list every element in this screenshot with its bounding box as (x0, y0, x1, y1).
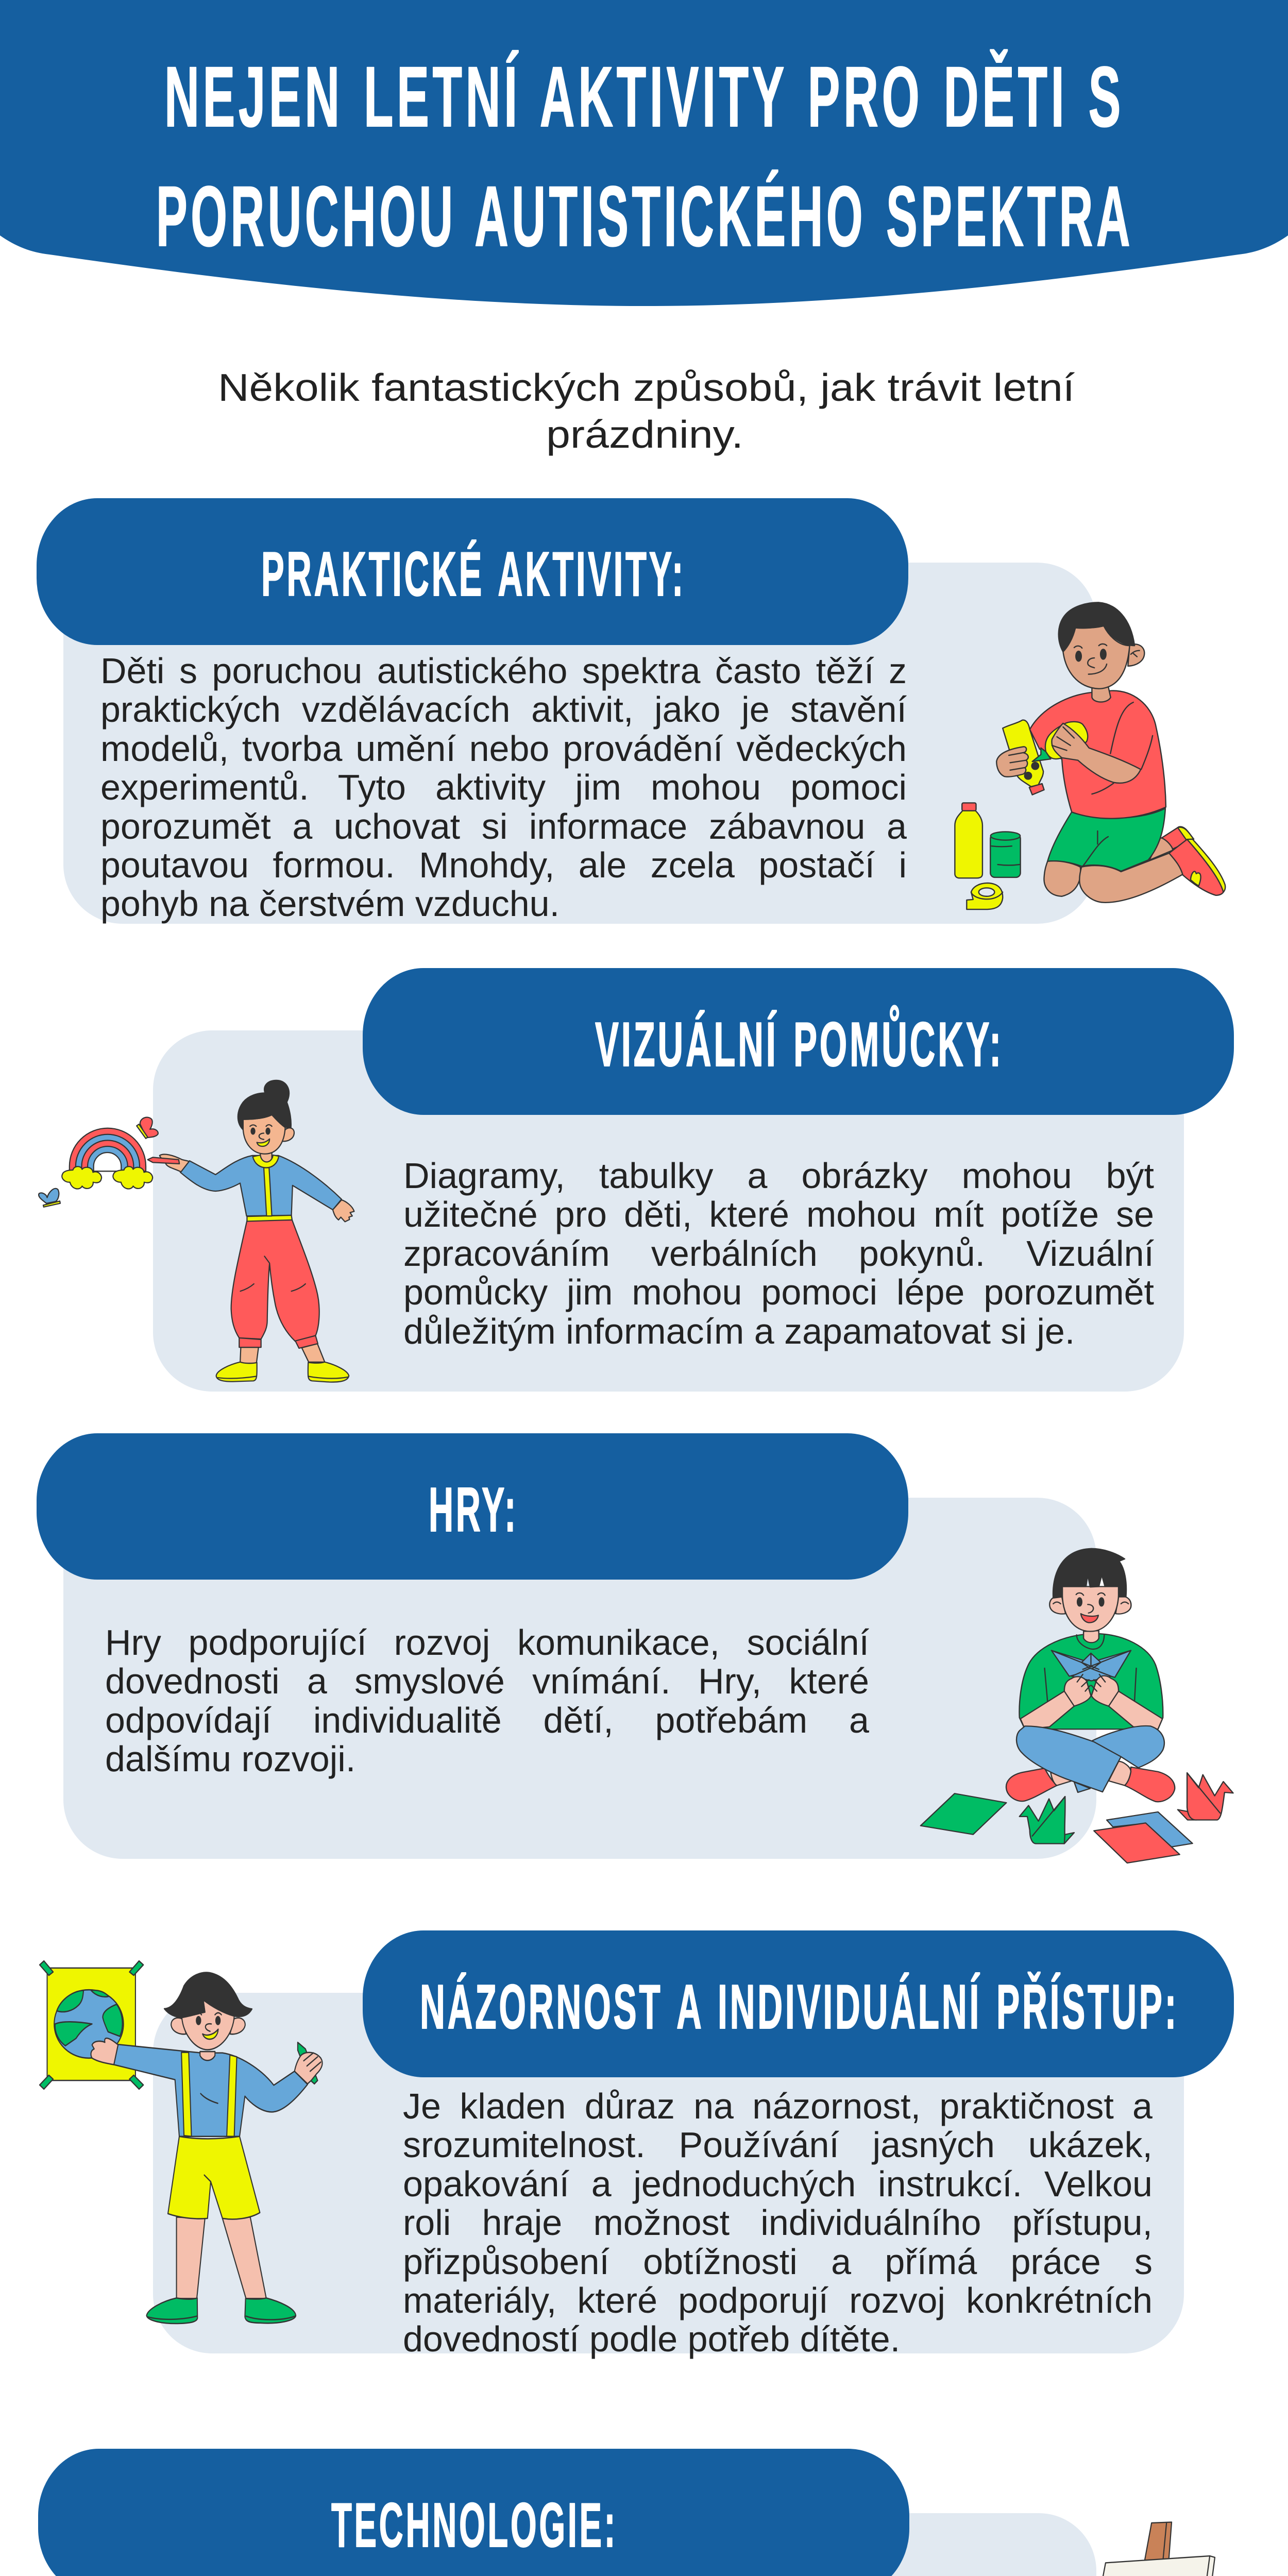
icon: green pencil (298, 2042, 317, 2084)
text: demonstration and individual approach: materiály, které podporují rozvoj konkrétních (403, 2280, 1153, 2320)
text: demonstration and individual approach: dovedností podle potřeb dítěte. (403, 2319, 900, 2359)
icon: red butterfly (137, 1117, 158, 1139)
text: visual aids: užitečné pro děti, které mohou mít potíže se (403, 1194, 1154, 1234)
icon: blue and red papers (1094, 1812, 1193, 1863)
illustration: boy pointing at globe poster (40, 1961, 323, 2324)
text: games: Hry podporující rozvoj komunikace, sociální (105, 1622, 869, 1663)
text: games: dalšímu rozvoji. (105, 1739, 355, 1779)
subtitle: prázdniny. (546, 413, 743, 456)
text: games: odpovídají individualitě dětí, potřebám a (105, 1700, 869, 1740)
text: visual aids: pomůcky jim mohou pomoci lépe porozumět (403, 1272, 1154, 1312)
illustration: boy with glue bottles (955, 602, 1225, 909)
icon: rainbow (62, 1128, 152, 1189)
panel: visual aids heading (363, 968, 1234, 1115)
panel: demonstration background (153, 1993, 1184, 2353)
text: visual aids: Diagramy, tabulky a obrázky mohou být (403, 1156, 1154, 1196)
text: demonstration and individual approach: Je kladen důraz na názornost, praktičnost a (403, 2086, 1153, 2126)
text: visual aids: zpracováním verbálních pokynů. Vizuální (403, 1233, 1154, 1274)
text: practical activities: porozumět a uchovat si informace zábavnou a (100, 806, 907, 846)
panel: technology heading: TECHNOLOGIE: (331, 2490, 618, 2560)
text: visual aids (403, 1156, 1154, 1351)
panel: practical activities heading (37, 498, 908, 645)
panel: games heading: HRY: (429, 1475, 518, 1545)
icon: globe poster (40, 1961, 143, 2089)
illustration: boy painting a robot on an easel (946, 2522, 1233, 2576)
icon: green crane (1020, 1797, 1074, 1844)
panel: games heading (37, 1433, 908, 1580)
text: demonstration and individual approach: roli hraje možnost individuálního přístupu, (403, 2202, 1153, 2243)
panel: visual aids background (153, 1030, 1184, 1392)
panel: practical activities background (63, 563, 1096, 924)
text: practical activities: modelů, tvorba umění nebo provádění vědeckých (100, 728, 907, 769)
subtitle: Několik fantastických způsobů, jak trávit letní (218, 366, 1075, 409)
panel: demonstration heading (363, 1930, 1234, 2077)
icon: red crane (1178, 1773, 1233, 1820)
title (156, 49, 1133, 264)
icon: blue butterfly (39, 1189, 60, 1207)
icon: easel (1076, 2522, 1233, 2576)
subtitle (218, 366, 1075, 456)
icon: green paper (921, 1793, 1006, 1835)
text: practical activities: praktických vzdělávacích aktivit, jako je stavění (100, 689, 907, 730)
illustration: boy with origami (921, 1549, 1233, 1863)
icon: origami boat (1052, 1651, 1131, 1681)
text: demonstration and individual approach (403, 2086, 1153, 2359)
text: practical activities (100, 651, 907, 924)
text: practical activities: pohyb na čerstvém vzduchu. (100, 884, 560, 924)
header banner (0, 0, 1288, 306)
text: demonstration and individual approach: opakování a jednoduchých instrukcí. Velkou (403, 2164, 1153, 2204)
text: visual aids: důležitým informacím a zapamatovat si je. (403, 1311, 1075, 1351)
panel: technology heading (38, 2449, 909, 2576)
panel: practical activities heading: PRAKTICKÉ AKTIVITY: (261, 539, 686, 609)
text: practical activities: Děti s poruchou autistického spektra často těží z (100, 651, 907, 691)
text: practical activities: experimentů. Tyto aktivity jim mohou pomoci (100, 767, 907, 807)
panel: games background (63, 1498, 1096, 1859)
text: demonstration and individual approach: přizpůsobení obtížnosti a přímá práce s (403, 2242, 1153, 2282)
text: games: dovednosti a smyslové vnímání. Hry, které (105, 1661, 869, 1701)
text: games (105, 1622, 869, 1779)
text: demonstration and individual approach: srozumitelnost. Používání jasných ukázek, (403, 2125, 1153, 2165)
text: practical activities: poutavou formou. Mnohdy, ale zcela postačí i (100, 845, 907, 885)
panel: technology background (65, 2513, 1096, 2576)
illustration: girl painting a rainbow (39, 1080, 354, 1382)
